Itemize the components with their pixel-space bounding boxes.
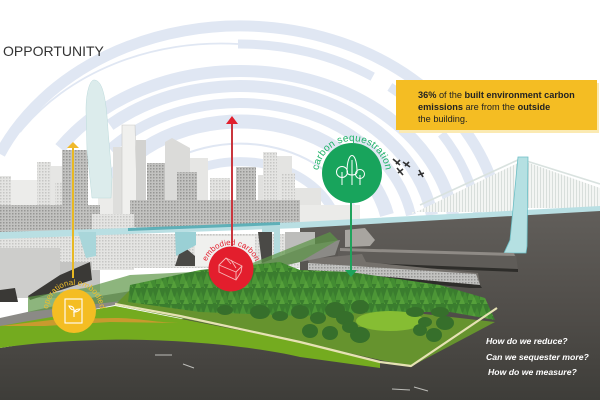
forest xyxy=(128,262,495,320)
arrow: operational line xyxy=(67,142,79,278)
piers xyxy=(308,228,518,288)
icon circle: operational embodied xyxy=(52,289,96,333)
callout text: the building. xyxy=(418,114,468,124)
birds xyxy=(393,159,424,177)
bridge main cables and suspenders xyxy=(412,159,600,214)
arrow: embodied carbon line xyxy=(226,116,238,246)
label: operational embodied: operational embodied xyxy=(44,279,106,308)
bridge tower xyxy=(504,157,528,253)
decorative arcs background xyxy=(0,26,495,218)
foreground buildings xyxy=(0,214,315,302)
boardwalk xyxy=(0,318,180,326)
foreground round trees xyxy=(217,300,454,343)
icon: seed bag xyxy=(65,299,82,323)
title: OPPORTUNITY xyxy=(3,43,105,59)
callout xyxy=(396,80,599,133)
icon: concrete block xyxy=(219,258,242,280)
park walkway edges xyxy=(115,304,497,366)
label: carbon sequestration: carbon sequestration xyxy=(314,136,391,170)
questions: How do we measure? xyxy=(488,367,578,377)
icon: trees xyxy=(336,156,364,185)
rowers xyxy=(155,355,428,391)
arrow: carbon sequestration line xyxy=(345,202,357,277)
callout text: emissions are from the outside xyxy=(418,102,550,112)
tree-lined road xyxy=(0,232,340,328)
label: embodied carbon: embodied carbon xyxy=(204,239,259,261)
bridge deck xyxy=(0,206,600,262)
questions: How do we reduce? xyxy=(486,336,568,346)
icon circle: carbon sequestration xyxy=(322,143,382,203)
Salesforce tower xyxy=(86,80,112,198)
city skyline xyxy=(0,125,360,240)
park meadow xyxy=(356,311,424,331)
questions: Can we sequester more? xyxy=(486,352,590,362)
callout text: 36% of the built environment carbon xyxy=(418,90,575,100)
bright green lawn xyxy=(0,306,380,368)
questions xyxy=(486,336,590,377)
water xyxy=(0,207,600,400)
icon circle: embodied carbon xyxy=(208,246,254,292)
park lawn xyxy=(115,290,495,366)
